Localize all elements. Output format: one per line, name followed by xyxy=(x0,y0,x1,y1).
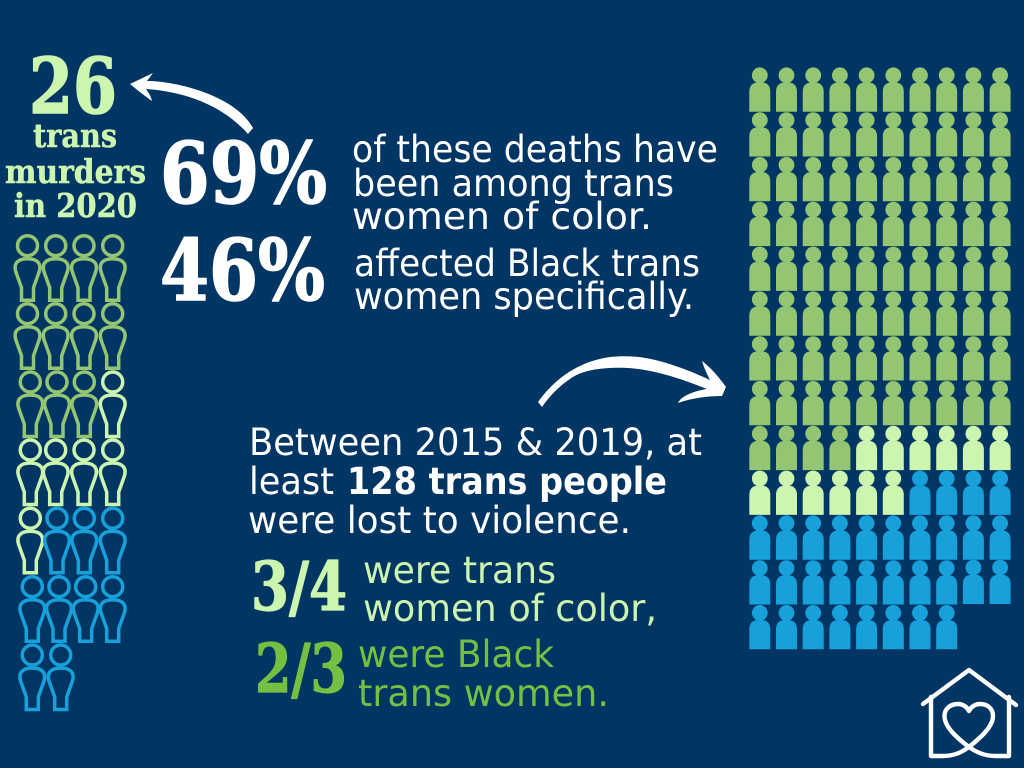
stat: 46% affected Black trans women xyxy=(160,221,700,320)
stat: 46% affected Black trans women: women specifically. xyxy=(354,275,694,318)
arrow: from 69% to 26 xyxy=(130,73,253,134)
icon: house with heart logo xyxy=(923,670,1016,756)
stat: 69% of these deaths: women of color. xyxy=(352,195,652,238)
stat: 69% of these deaths: been among trans xyxy=(353,162,674,205)
stat: 2/3 were Black trans women xyxy=(255,629,609,715)
text: between 2015 and 2019 xyxy=(248,421,702,542)
arrow: pointing to the 128 figure grid xyxy=(538,356,726,407)
headline: 26 trans murders in 2020 xyxy=(5,42,146,225)
text: between 2015 and 2019: Between 2015 & 2019, at xyxy=(249,421,702,464)
text: between 2015 and 2019: least xyxy=(249,460,334,503)
stat: 2/3 were Black trans women: were Black xyxy=(358,633,555,676)
stat: 3/4 were trans women of color xyxy=(251,547,657,630)
headline: 26 trans murders in 2020: trans xyxy=(33,116,117,155)
stat: 69% of these deaths: 69% xyxy=(160,124,327,223)
stat: 46% affected Black trans women: affected Black trans xyxy=(354,242,700,285)
text: between 2015 and 2019: were lost to violence. xyxy=(248,499,631,542)
stat: 3/4 were trans women of color: were trans xyxy=(363,549,556,592)
stat: 2/3 were Black trans women: trans women. xyxy=(358,672,609,715)
pictogram: 128 solid figures xyxy=(749,67,1011,649)
stat: 3/4 were trans women of color: women of color, xyxy=(363,587,657,630)
stat: 69% of these deaths xyxy=(160,124,718,238)
stat: 2/3 were Black trans women: 2/3 xyxy=(255,629,347,708)
headline: 26 trans murders in 2020: murders xyxy=(5,152,146,191)
stat: 3/4 were trans women of color: 3/4 xyxy=(251,547,347,626)
stat: 46% affected Black trans women: 46% xyxy=(160,221,325,320)
headline: 26 trans murders in 2020: in 2020 xyxy=(14,186,137,225)
stat: 69% of these deaths: of these deaths have xyxy=(352,128,718,171)
text: between 2015 and 2019: 128 trans people xyxy=(347,460,667,503)
headline: 26 trans murders in 2020: 26 xyxy=(29,42,117,132)
pictogram: 26 outlined figures xyxy=(15,236,125,709)
